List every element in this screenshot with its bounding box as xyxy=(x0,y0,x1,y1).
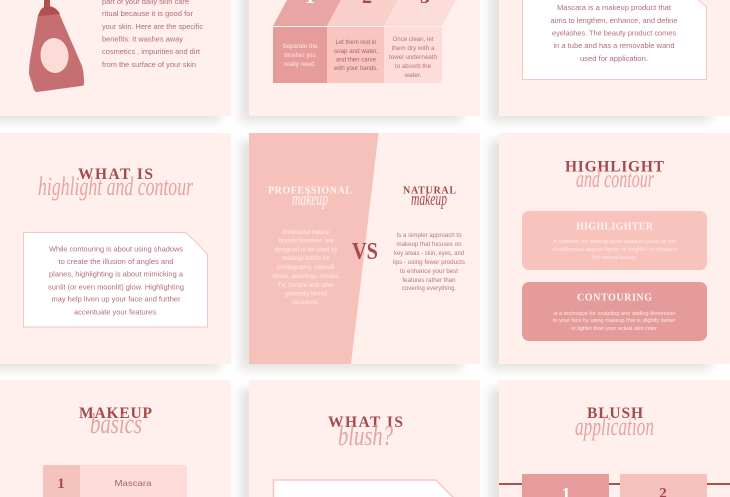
heading xyxy=(79,405,153,440)
step 2 xyxy=(620,474,707,497)
heading: basics xyxy=(90,409,142,440)
panel: brush cleaning steps xyxy=(249,0,480,116)
callout card xyxy=(24,232,208,327)
card: contouring: or lighter than your actual skin color. xyxy=(571,326,658,332)
callout card: may help liven up your face and further xyxy=(52,294,181,304)
heading xyxy=(38,166,194,201)
list item 1: 1 xyxy=(57,476,65,492)
callout card: mascara: aims to lengthen, enhance, and define xyxy=(550,16,678,25)
panel: what is blush xyxy=(249,380,480,497)
step 2: with your hands. xyxy=(333,66,378,72)
professional column: shows, weddings, movies, xyxy=(272,274,340,280)
step 1: Separate the xyxy=(282,44,318,50)
card: contouring xyxy=(522,282,707,341)
callout card: planes, highlighting is about mimicking a xyxy=(49,270,184,278)
heading: and contour xyxy=(576,166,654,193)
step 3: to absorb the xyxy=(395,64,432,70)
professional column: occasions. xyxy=(292,300,320,306)
professional column: generally filmed xyxy=(285,292,327,298)
callout card xyxy=(274,480,457,497)
text block: cleanser benefits: benefits: It washes away xyxy=(102,34,183,44)
step 3: water. xyxy=(403,73,422,79)
callout card: mascara: eyelashes. The beauty product comes xyxy=(552,28,676,38)
professional column: designed to be used by xyxy=(274,248,338,254)
step 1 xyxy=(273,0,342,83)
text block: cleanser benefits: from the surface of your skin xyxy=(102,60,196,69)
heading: application xyxy=(575,412,654,441)
left side background xyxy=(249,133,378,364)
natural column: makeup xyxy=(411,189,447,210)
step 1: really need. xyxy=(284,62,316,68)
panel: what is highlight and contour xyxy=(0,133,231,364)
text block: cleanser benefits: ritual because it is good for xyxy=(102,9,194,18)
step 2: soap and water, xyxy=(334,49,378,55)
heading: highlight and contour xyxy=(38,172,194,201)
heading: BLUSH xyxy=(587,405,643,422)
heading xyxy=(565,158,665,193)
card: contouring: is a technique for sculpting and adding dimension xyxy=(554,311,676,317)
heading: WHAT IS xyxy=(328,414,403,431)
step 1 xyxy=(522,474,609,497)
callout card: mascara: in a tube and has a removable wand xyxy=(554,41,674,50)
professional column: brands however, are xyxy=(278,238,334,244)
panel: blush application xyxy=(499,380,730,497)
heading: blush? xyxy=(338,421,393,452)
callout card: to create the illusion of angles and xyxy=(58,257,174,266)
text block: cleanser benefits: your skin. Here are the specific xyxy=(102,22,203,31)
list item 1 xyxy=(43,465,187,497)
natural column: key areas - skin, eyes, and xyxy=(394,251,464,257)
callout card: sunlit (or even moonlit) glow. Highlighting xyxy=(48,282,184,292)
panel: makeup basics xyxy=(0,380,231,497)
natural column: Is a simpler approach to xyxy=(396,233,462,239)
natural column: NATURAL xyxy=(403,186,456,196)
professional column: PROFESSIONAL xyxy=(268,186,352,196)
professional column: makeup xyxy=(292,189,328,210)
card: highlighter: A cosmetic for making facial features (such as the xyxy=(553,239,676,245)
panel: highlight and contour definitions xyxy=(499,133,730,364)
panel: what is mascara xyxy=(499,0,730,116)
card: highlighter: HIGHLIGHTER xyxy=(576,222,654,232)
step 3: towel underneath xyxy=(389,55,437,61)
heading xyxy=(328,414,403,452)
connector line xyxy=(499,483,730,485)
text block: cleanser benefits xyxy=(102,0,203,69)
card: contouring: CONTOURING xyxy=(577,292,652,304)
natural column: makeup that focuses on xyxy=(396,242,462,248)
text block: cleanser benefits: cosmetics , impurities and dirt xyxy=(102,47,201,56)
heading xyxy=(575,405,654,441)
step 2: Let them rest in xyxy=(336,40,376,46)
natural column: lips - using fewer products xyxy=(393,260,465,266)
natural column: features rather than xyxy=(402,278,456,284)
panel: professional vs natural makeup xyxy=(249,133,480,364)
card: highlighter: her natural beauty. xyxy=(592,255,637,261)
callout card: mascara xyxy=(522,0,706,80)
step 1: brushes you xyxy=(284,53,316,59)
callout card: mascara: Mascara is a makeup product that xyxy=(557,3,672,12)
step 3: Once clean, let xyxy=(392,37,434,43)
natural column: to enhance your best xyxy=(400,269,458,275)
VS label: VS xyxy=(352,239,378,265)
list item 1: Mascara xyxy=(114,478,152,488)
icon: cleanser bottle xyxy=(29,0,84,92)
callout card: While contouring is about using shadows xyxy=(49,244,183,254)
heading: HIGHLIGHT xyxy=(565,158,665,176)
card: highlighter: cheekbones) appear lighter or brighter to enhance xyxy=(552,247,677,253)
heading: MAKEUP xyxy=(79,405,153,422)
natural column: covering everything. xyxy=(402,286,456,292)
step 3 xyxy=(384,0,457,83)
professional column: TV, theatre and other xyxy=(278,283,334,289)
natural column xyxy=(393,186,465,292)
callout card: accentuate your features. xyxy=(74,308,158,316)
professional column: Professional makeup xyxy=(282,230,330,236)
professional column: makeup artists for xyxy=(282,256,330,262)
step 3: them dry with a xyxy=(392,46,435,52)
professional column xyxy=(268,186,352,306)
card: highlighter xyxy=(522,211,707,270)
step 2: and then carve xyxy=(336,58,377,64)
step 2 xyxy=(327,0,399,83)
professional column: photography, catwalk xyxy=(277,265,336,271)
card: contouring: to your face by using makeup that is slightly darker xyxy=(553,318,676,324)
heading: WHAT IS xyxy=(78,166,153,183)
panel: cleanser benefits xyxy=(0,0,231,116)
callout card: mascara: used for application. xyxy=(580,54,648,63)
